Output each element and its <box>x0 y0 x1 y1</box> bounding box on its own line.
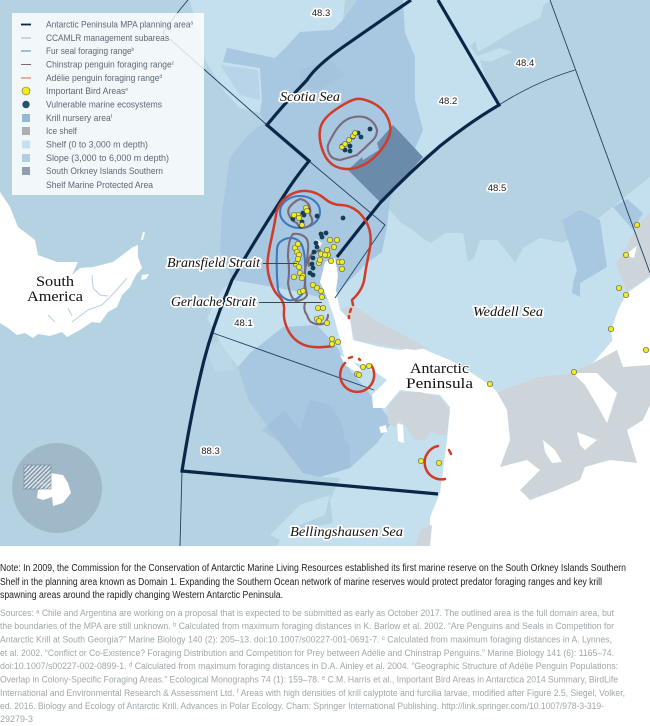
legend: Ice shelf <box>46 125 77 136</box>
sources text <box>0 608 625 725</box>
sea and place labels: Antarctic <box>410 361 469 377</box>
subarea numbers: 48.5 <box>488 183 506 194</box>
subarea numbers: 48.4 <box>516 58 534 69</box>
ice shelf inner land <box>543 246 637 463</box>
sea and place labels: America <box>27 289 84 305</box>
legend: Chinstrap penguin foraging range <box>46 58 185 70</box>
foraging ranges <box>267 99 451 479</box>
sea and place labels: Bellingshausen Sea <box>290 524 403 539</box>
Antarctic Peninsula MPA planning area <box>182 0 499 494</box>
ocean slope background <box>0 0 650 546</box>
legend: Fur seal foraging range <box>46 45 143 56</box>
legend: CCAMLR management subareas <box>46 32 169 43</box>
shelf speckles in the slope <box>270 5 544 540</box>
legend: Krill nursery area <box>46 112 117 123</box>
shelf areas <box>190 0 650 546</box>
CCAMLR management subareas <box>163 0 650 546</box>
note text <box>0 563 626 601</box>
legend <box>12 13 204 195</box>
legend: Shelf Marine Protected Area <box>46 179 154 190</box>
sources text: 29279-3 <box>0 714 33 725</box>
sea and place labels: Weddell Sea <box>473 304 543 319</box>
fur seal foraging range <box>277 196 320 300</box>
sea and place labels: Bransfield Strait <box>167 255 261 270</box>
legend: b <box>132 47 134 53</box>
legend: d <box>159 74 162 80</box>
subarea numbers: 48.1 <box>234 318 253 329</box>
subarea numbers: 48.3 <box>312 8 330 19</box>
ice shelf <box>340 213 650 546</box>
South America inner channels <box>48 275 127 322</box>
map panel <box>0 0 650 546</box>
krill area textures <box>220 65 280 442</box>
land: South America <box>0 192 149 338</box>
sea and place labels <box>27 89 543 539</box>
chinstrap penguin foraging range <box>288 116 377 324</box>
sea and place labels: South <box>36 274 75 290</box>
land: Antarctic Peninsula and continent <box>315 239 650 546</box>
legend: Important Bird Areas <box>46 85 131 96</box>
legend: a <box>191 20 193 26</box>
legend: Slope (3,000 to 6,000 m depth) <box>46 152 169 163</box>
krill nursery area <box>220 0 643 477</box>
sea and place labels: Peninsula <box>406 376 474 392</box>
vulnerable marine ecosystems dots <box>291 127 372 277</box>
legend: c <box>172 60 174 66</box>
legend: f <box>111 114 113 120</box>
subarea numbers: 88.3 <box>201 446 220 457</box>
strait leader lines <box>259 264 322 302</box>
inset locator globe <box>12 443 102 533</box>
legend: Shelf (0 to 3,000 m depth) <box>46 138 148 150</box>
legend: Vulnerable marine ecosystems <box>46 98 162 110</box>
legend: e <box>125 87 128 93</box>
legend: South Orkney Islands Southern <box>46 165 163 176</box>
sea and place labels: Gerlache Strait <box>171 294 257 309</box>
Adelie penguin foraging range <box>267 99 451 479</box>
legend: Adélie penguin foraging range <box>46 72 171 83</box>
subarea numbers: 48.2 <box>439 96 457 107</box>
South Orkney Islands Southern Shelf Marine Protected Area <box>348 125 423 203</box>
note text: spawning areas around the rapidly changing Western Antarctic Peninsula. <box>0 590 283 601</box>
sea and place labels: Scotia Sea <box>280 89 340 104</box>
Important Bird Areas dots <box>291 130 649 466</box>
legend: Antarctic Peninsula MPA planning area <box>46 18 207 30</box>
subarea numbers <box>201 8 534 457</box>
